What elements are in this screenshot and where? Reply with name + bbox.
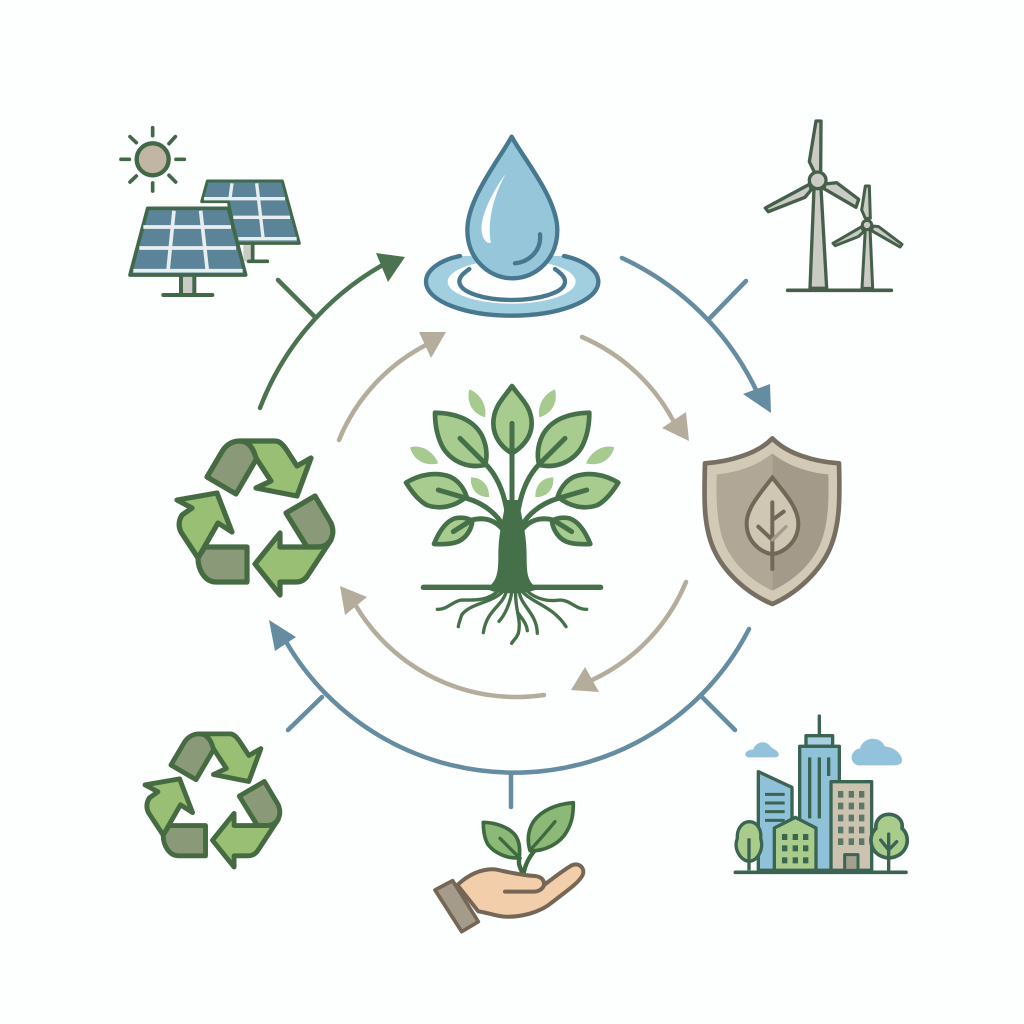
top arrow <box>171 734 261 781</box>
left tree <box>736 822 762 870</box>
right arrow <box>255 496 333 595</box>
right arrow <box>212 781 280 867</box>
icon: large recycle symbol <box>177 441 333 595</box>
main leaves <box>406 386 618 544</box>
ripple pool <box>426 256 598 316</box>
shield left panel <box>716 453 772 591</box>
inner arrow: upper left <box>339 332 446 440</box>
outer arrow: blue, water to shield <box>622 258 771 413</box>
icon: water drop and ripples <box>426 137 598 316</box>
icon: small turbine <box>833 186 902 288</box>
icon: wind turbines <box>765 121 902 290</box>
icon: solar panels and sun <box>121 128 299 295</box>
right tree <box>871 814 907 870</box>
icon: front solar panel <box>130 208 246 295</box>
inner arrow: upper right <box>582 337 689 441</box>
inner arrow: lower right <box>571 582 686 692</box>
icon: rear solar panel <box>202 181 299 261</box>
icon: large turbine <box>765 121 859 288</box>
skyscraper <box>800 716 839 870</box>
leaf emblem <box>747 478 798 569</box>
icon: shield with leaf <box>704 438 839 604</box>
left arrow <box>145 779 206 856</box>
top arrow <box>207 441 311 496</box>
icon: sun <box>121 128 184 191</box>
outer arrow: green, solar to water <box>260 253 405 408</box>
angled tower <box>758 772 792 870</box>
tan building <box>831 782 872 870</box>
shield body <box>704 438 839 604</box>
green house building <box>774 817 816 870</box>
cuff <box>435 881 478 932</box>
ground line <box>735 867 906 878</box>
icon: small recycle symbol <box>145 734 280 867</box>
icon: tree with roots <box>406 386 618 643</box>
shield right panel <box>772 453 829 591</box>
left arrow <box>177 493 247 582</box>
seedling <box>483 803 573 875</box>
clouds <box>745 739 902 765</box>
icon: hand holding seedling <box>435 803 583 932</box>
small background leaves <box>410 389 614 497</box>
inner arrow: lower left <box>340 586 544 697</box>
outer arrow: blue, bottom arc <box>269 620 749 807</box>
trunk and branches <box>423 423 601 643</box>
water drop <box>467 137 557 278</box>
icon: city skyline <box>735 716 907 872</box>
hand <box>457 864 583 917</box>
